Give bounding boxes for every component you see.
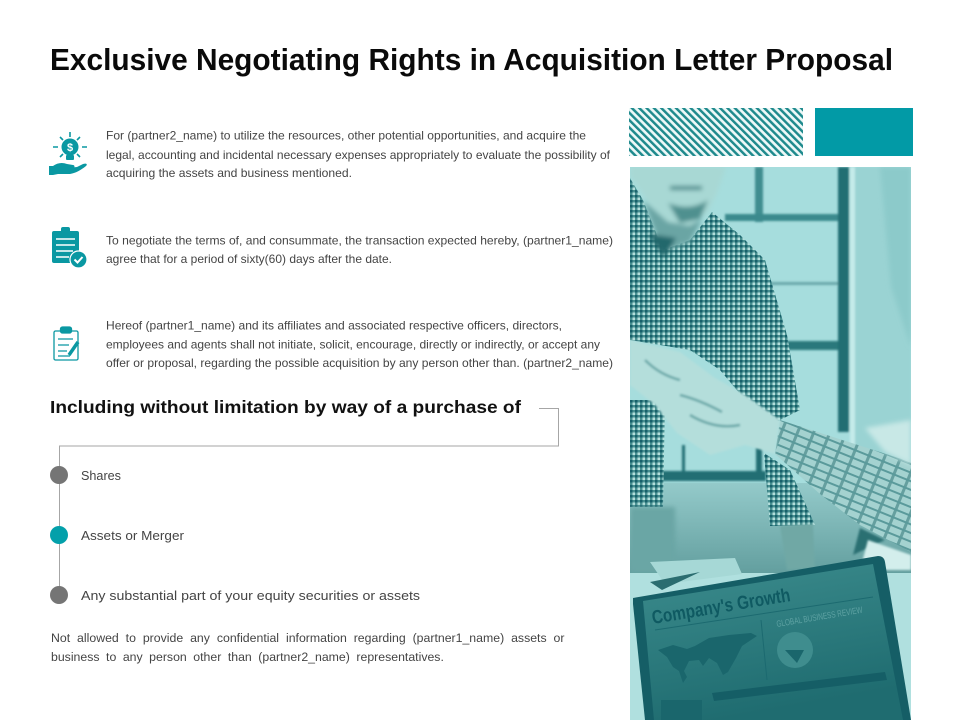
list item: assets or merger [50, 526, 185, 544]
laptop screen content [650, 585, 887, 720]
teal block [815, 108, 913, 156]
hands [630, 340, 780, 455]
background person and desk [865, 420, 911, 465]
text block: confidentiality note: business to any person other than (partner2_name) representatives. [51, 650, 444, 664]
list item: shares [50, 466, 121, 484]
man's shirt [630, 178, 800, 425]
text block: resources [106, 128, 611, 180]
text block: affiliates: employees and agents shall not initiate, solicit, encourage, directly or indirectly, or accept any [106, 338, 600, 352]
striped decorative block [629, 108, 803, 156]
text block: confidentiality note [51, 631, 564, 664]
trousers and leg [630, 504, 676, 546]
subheading: Including without limitation by way of a purchase of [50, 397, 521, 417]
text block: affiliates: Hereof (partner1_name) and its affiliates and associated respective officers, directors, [106, 318, 562, 332]
text block: negotiate: agree that for a period of sixty(60) days after the date. [106, 252, 392, 266]
laptop screen content: GLOBAL BUSINESS REVIEW [776, 605, 863, 629]
list item: assets or merger: Assets or Merger [81, 528, 185, 543]
text block: affiliates [106, 318, 613, 370]
face and neck [630, 167, 726, 258]
icon: checklist clipboard with check badge [52, 227, 87, 268]
list item: shares: Shares [81, 468, 121, 483]
text block: resources: legal, accounting and incidental necessary expenses appropriately to evaluate the possibility of [106, 148, 611, 162]
sleeve [775, 420, 911, 552]
text block: confidentiality note: Not allowed to provide any confidential information regarding (partner1_name) assets or [51, 631, 564, 645]
photo: handshake over laptop [630, 167, 911, 720]
text block: resources: For (partner2_name) to utilize the resources, other potential opportunities, and acquire the [106, 128, 586, 142]
laptop screen content: Company's Growth [650, 585, 792, 629]
text block: resources: acquiring the assets and business mentioned. [106, 166, 352, 180]
text block: affiliates: offer or proposal, regarding the possible acquisition by any person other than. (partner2_name) [106, 356, 613, 370]
icon: hand holding dollar lightbulb [49, 132, 87, 175]
title: Exclusive Negotiating Rights in Acquisition Letter Proposal [50, 42, 893, 77]
icon: hand holding dollar lightbulb: $ [67, 142, 73, 154]
list item: equity securities: Any substantial part of your equity securities or assets [81, 588, 421, 603]
icon: clipboard outline with pencil [54, 327, 78, 360]
laptop [633, 556, 911, 720]
list item: equity securities [50, 586, 421, 604]
text block: negotiate: To negotiate the terms of, and consummate, the transaction expected hereby, (partner1_name) [106, 234, 613, 248]
text block: negotiate [106, 234, 613, 266]
connector line [60, 408, 558, 595]
